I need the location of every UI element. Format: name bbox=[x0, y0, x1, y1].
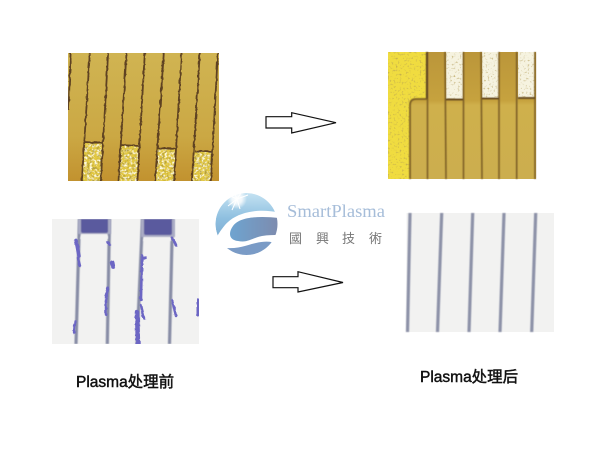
logo Chinese name: 術 bbox=[369, 231, 382, 246]
rough etched lines bbox=[68, 50, 218, 184]
logo Chinese name: 國 bbox=[289, 231, 302, 246]
bright gold field bbox=[388, 52, 427, 179]
logo: SmartPlasma 國興技術 bbox=[216, 193, 385, 255]
logo wordmark: SmartPlasma bbox=[287, 201, 385, 221]
dark pads bbox=[78, 219, 175, 241]
label: before plasma: Plasma处理前 bbox=[76, 373, 174, 391]
arrow: top process arrow bbox=[266, 113, 336, 133]
logo Chinese name: 興 bbox=[316, 231, 329, 246]
purple residue bbox=[74, 238, 198, 344]
photo: copper fingers after plasma bbox=[388, 52, 536, 179]
grey traces bbox=[76, 219, 172, 344]
gold pads before plasma bbox=[82, 142, 213, 181]
photo: copper fingers before plasma bbox=[68, 50, 219, 184]
white pads bbox=[446, 52, 534, 99]
logo Chinese name bbox=[289, 231, 382, 246]
logo globe icon bbox=[216, 193, 278, 255]
photo: clean traces after plasma bbox=[406, 213, 554, 332]
etched lines bbox=[410, 52, 535, 179]
photo: traces with residue before plasma bbox=[52, 219, 199, 344]
logo Chinese name: 技 bbox=[342, 231, 355, 246]
arrow: bottom process arrow bbox=[273, 272, 343, 292]
label: after plasma: Plasma处理后 bbox=[420, 368, 518, 386]
